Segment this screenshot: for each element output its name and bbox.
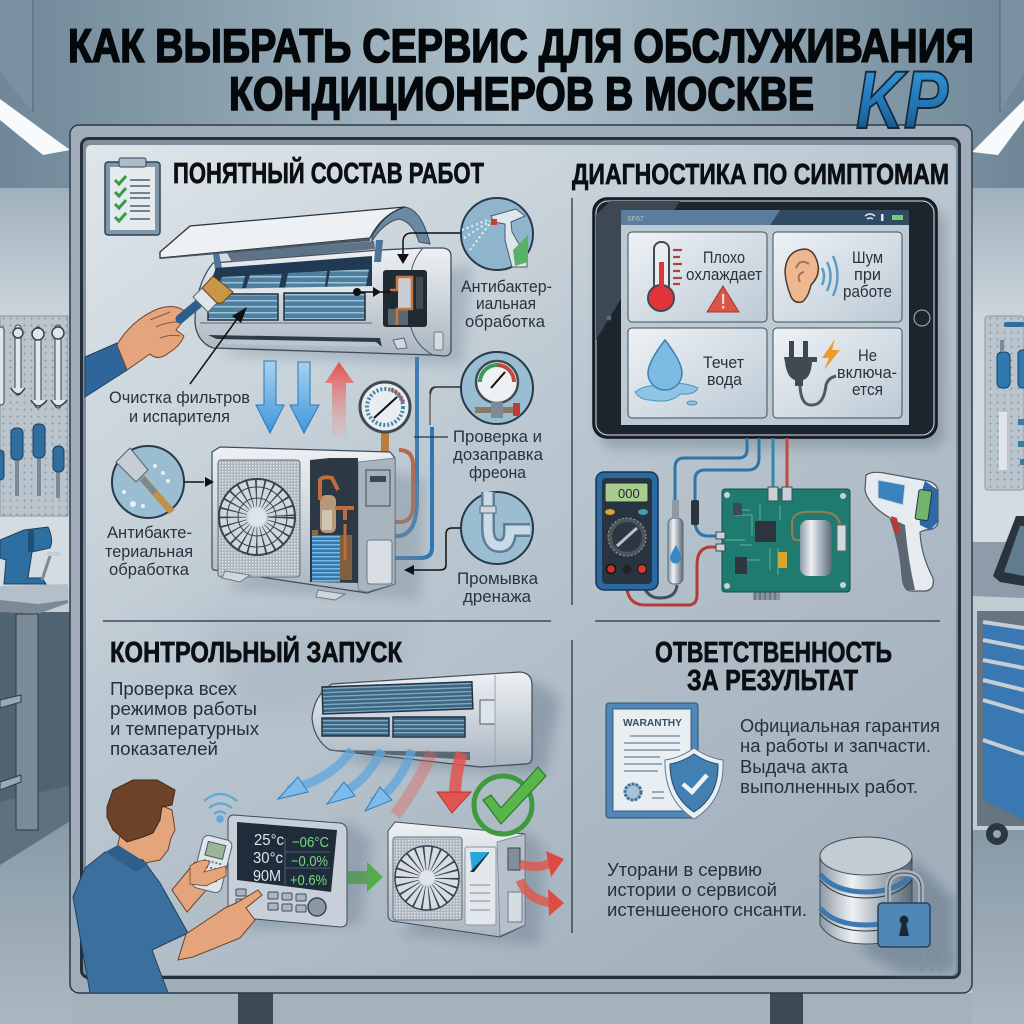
panel: diagnostics by symptoms — [572, 159, 949, 605]
indoor AC running — [312, 672, 560, 775]
circuit board with compressor — [716, 487, 850, 600]
text: service history: Уторани в сервию — [607, 859, 762, 880]
callout: cleaning filters: Очистка фильтров — [109, 389, 250, 407]
tablet — [593, 198, 945, 448]
card: noise — [773, 232, 902, 322]
icon: thermometer — [648, 242, 682, 311]
callout: refrigerant check — [453, 428, 544, 482]
neck and face — [116, 805, 175, 864]
panel: clear scope of work — [85, 157, 552, 606]
back arm and hand with remote — [172, 862, 215, 912]
text: service history: истории о сервисой — [607, 879, 777, 900]
fan grille — [218, 460, 300, 577]
arrow: warm air up — [325, 362, 354, 437]
warranty certificate: WARANTHY — [623, 718, 682, 729]
callout: antibacterial treatment left: обработка — [109, 561, 190, 579]
control panel display: 25°c — [254, 832, 284, 849]
text: check all modes: и температурных — [110, 718, 260, 739]
card: leak: вода — [707, 371, 743, 389]
callout: antibacterial treatment right — [461, 278, 552, 331]
text: official warranty: Официальная гарантия — [740, 715, 940, 736]
icon: warning triangle — [707, 286, 739, 312]
icon: database — [820, 837, 912, 944]
card: poor cooling: охлаждает — [686, 266, 762, 284]
inset: spray treatment — [397, 198, 533, 270]
inset: drain pipe — [404, 492, 533, 575]
control panel display: 30°c — [253, 850, 283, 867]
text: check all modes — [110, 678, 260, 759]
inset: gauge — [430, 352, 533, 424]
text: check all modes: показателей — [110, 738, 218, 759]
icon: clipboard checklist — [105, 158, 160, 235]
card: noise: при — [854, 266, 881, 284]
shirt — [73, 852, 188, 993]
callout: refrigerant check: фреона — [469, 464, 527, 482]
hair — [107, 780, 175, 842]
manifold gauge — [360, 382, 410, 452]
card: does not turn on: ется — [852, 381, 883, 399]
card: leak: Течет — [703, 354, 744, 372]
control panel display — [228, 815, 372, 930]
main title — [68, 19, 974, 120]
card: poor cooling: Плохо — [703, 249, 745, 267]
tablet: SF67 — [627, 216, 644, 223]
arrow: cold air down 2 — [290, 362, 319, 433]
control panel display: 90M — [253, 868, 281, 885]
heading: clear scope: ПОНЯТНЫЙ СОСТАВ РАБОТ — [173, 157, 484, 190]
heading: responsibility: ЗА РЕЗУЛЬТАТ — [687, 665, 858, 697]
callout: refrigerant check: дозаправка — [453, 446, 544, 464]
cutaway with compressor and coil — [310, 458, 358, 583]
air filters — [207, 256, 372, 320]
callout: refrigerant check: Проверка и — [453, 428, 542, 446]
callout: antibacterial treatment right: обработка — [465, 313, 546, 331]
green arrow — [348, 862, 383, 892]
callout: antibacterial treatment left: Антибакте- — [107, 524, 192, 542]
card: poor cooling — [628, 232, 767, 322]
callout: antibacterial treatment left: териальная — [105, 543, 193, 561]
temperature probe — [668, 500, 699, 584]
callout: cleaning filters: и испарителя — [129, 408, 230, 426]
text: official warranty — [740, 715, 940, 797]
text: check all modes: Проверка всех — [110, 678, 238, 699]
hand with brush — [85, 276, 233, 397]
control panel display: +0.6% — [290, 872, 327, 889]
indoor AC unit — [160, 207, 472, 365]
heading: control start: КОНТРОЛЬНЫЙ ЗАПУСК — [110, 636, 403, 669]
KP logo: KP — [856, 55, 948, 146]
pointing arm — [178, 890, 262, 960]
card: noise: работе — [843, 283, 892, 301]
text: service history — [607, 859, 807, 920]
callout: antibacterial treatment left — [105, 524, 193, 579]
ceiling light right — [972, 100, 1024, 155]
text: check all modes: режимов работы — [110, 698, 257, 719]
text: official warranty: выполненных работ. — [740, 776, 918, 797]
right pegboard with tools — [985, 316, 1024, 490]
airflow arrows red — [395, 752, 471, 815]
front lid — [227, 241, 375, 262]
ceiling light left — [0, 99, 70, 155]
internal compartment with pipes — [383, 270, 427, 327]
text: service history: истеншееного снсанти. — [607, 899, 807, 920]
right monitor and tool cabinet — [972, 516, 1024, 845]
connecting wires — [627, 438, 787, 605]
left workbench with vise — [0, 527, 68, 830]
callout: cleaning filters — [109, 389, 250, 426]
icon: plug and bolt — [784, 339, 840, 405]
callout: antibacterial treatment right: иальная — [476, 295, 536, 313]
icon: ear — [785, 249, 838, 302]
callout: drain flush: Промывка — [457, 570, 539, 588]
card: does not turn on: Не — [858, 347, 877, 365]
outdoor unit checked — [388, 822, 545, 945]
arrow to filter — [190, 307, 247, 384]
card: does not turn on — [773, 328, 902, 418]
text: official warranty: Выдача акта — [740, 756, 849, 777]
technician — [73, 780, 262, 993]
icon: shield — [665, 748, 723, 819]
callout: antibacterial treatment right: Антибактер- — [461, 278, 552, 296]
inset: nozzle — [112, 446, 214, 518]
main title: КОНДИЦИОНЕРОВ В МОСКВЕ — [229, 67, 814, 120]
card: noise: Шум — [852, 249, 883, 267]
callout: drain flush: дренажа — [463, 588, 532, 606]
shadow behind database — [860, 860, 955, 973]
small KP watermark: KP — [919, 948, 954, 978]
control panel display: −06°C — [292, 834, 329, 851]
exhaust arrows red — [520, 851, 564, 916]
card: does not turn on: включа- — [837, 364, 897, 382]
heading: responsibility: ОТВЕТСТВЕННОСТЬ — [655, 637, 892, 669]
airflow arrows blue — [278, 750, 412, 811]
panel: responsibility for result — [606, 637, 955, 978]
text: official warranty: на работы и запчасти. — [740, 735, 931, 756]
heading: responsibility — [655, 637, 892, 697]
multimeter — [596, 472, 658, 590]
callout: drain flush — [457, 570, 539, 606]
icon: padlock — [878, 873, 930, 947]
infrared thermometer — [865, 472, 938, 591]
arrow: cold air down 1 — [256, 361, 284, 433]
control panel display: −0.0% — [291, 853, 328, 870]
outdoor AC unit — [212, 447, 425, 600]
icon: water drop — [635, 340, 698, 405]
board frame — [70, 125, 972, 993]
warranty certificate — [606, 703, 723, 819]
icon: wifi — [204, 794, 237, 822]
panel: control start — [73, 636, 564, 993]
card: leak — [628, 328, 767, 418]
multimeter: 000 — [618, 486, 640, 501]
refrigerant and drain pipes — [373, 357, 448, 558]
left pegboard with tools — [0, 316, 68, 516]
green check mark — [474, 767, 546, 834]
